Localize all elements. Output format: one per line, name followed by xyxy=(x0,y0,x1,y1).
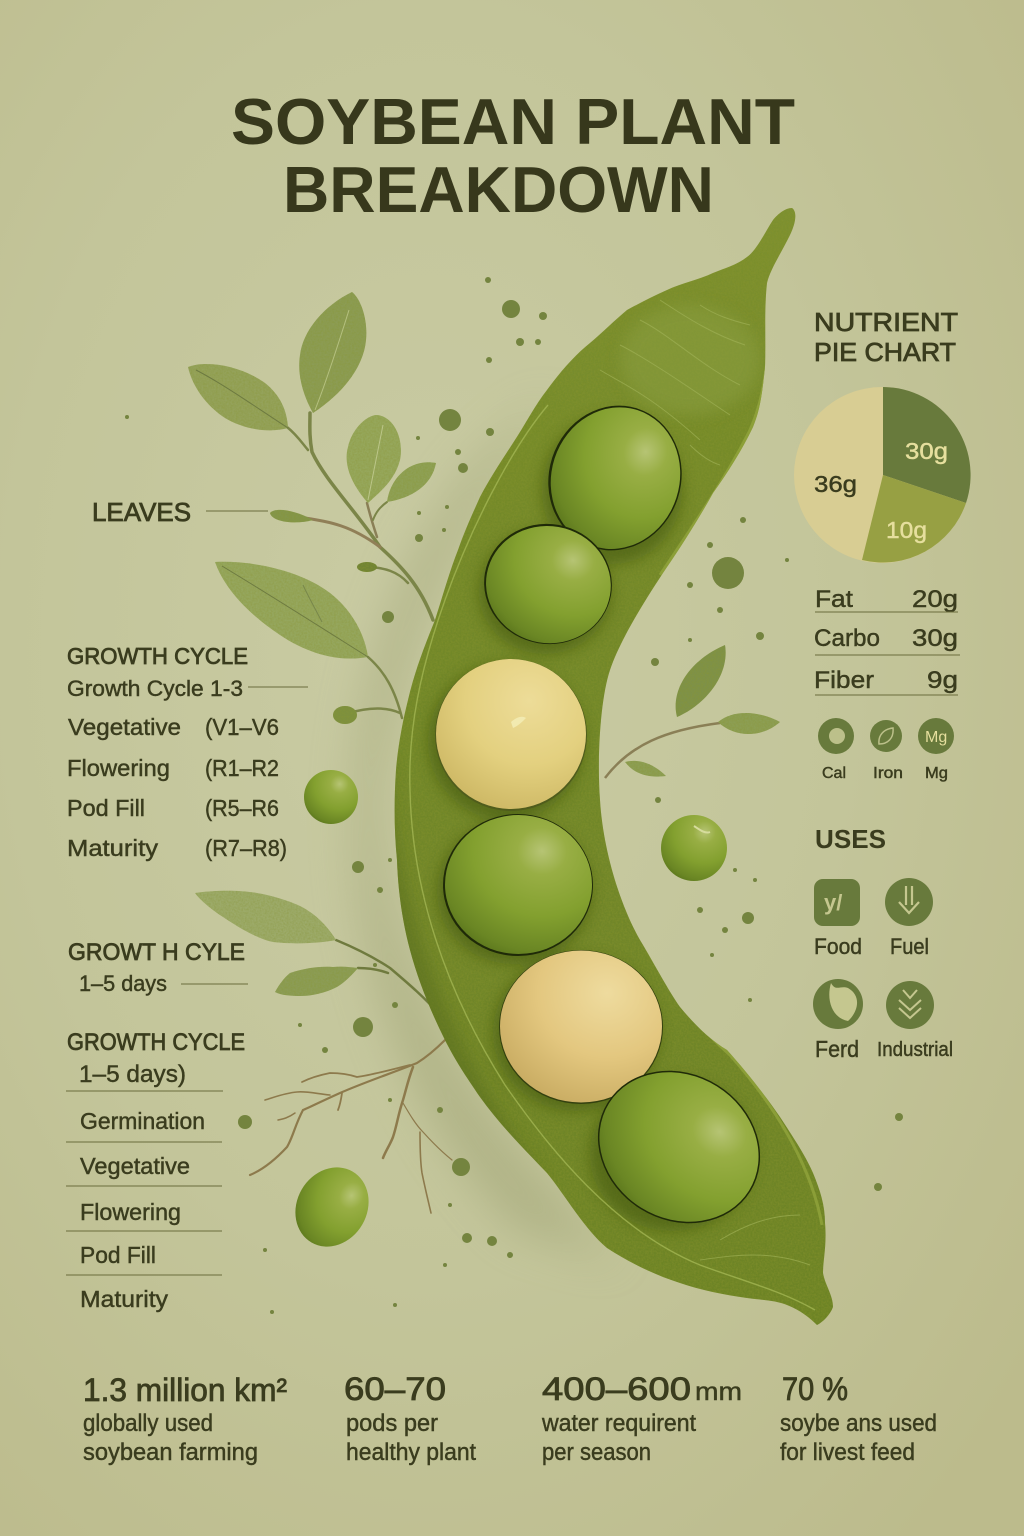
icon: food xyxy=(814,879,860,926)
nutrient pie chart heading: PIE CHART xyxy=(814,337,956,367)
nutrient pie chart heading: NUTRIENT xyxy=(814,307,958,337)
uses icons: Food xyxy=(814,934,862,959)
pod shading and veins xyxy=(379,285,822,1310)
bean 3 xyxy=(435,659,587,811)
stat: water: water requirent xyxy=(541,1410,696,1437)
nutrient table xyxy=(814,586,960,695)
growth cycle stages list: (V1–V6 xyxy=(205,714,279,740)
growth cycle days xyxy=(68,939,248,996)
growth cycle stages list: Pod Fill xyxy=(67,795,145,821)
pod body xyxy=(395,208,833,1325)
loose bean: right xyxy=(661,815,727,881)
growth cycle table: Vegetative xyxy=(80,1153,190,1179)
growth cycle stages list: Flowering xyxy=(67,755,170,781)
growth cycle stages list: Vegetative xyxy=(68,714,181,740)
nutrient table: 30g xyxy=(912,625,958,652)
mineral icons xyxy=(818,718,954,782)
buds xyxy=(270,510,313,522)
icon: Iron xyxy=(870,720,902,752)
stat: farmland: soybean farming xyxy=(83,1439,258,1466)
stat: farmland xyxy=(83,1372,287,1466)
growth cycle table: Pod Fill xyxy=(80,1242,156,1268)
pod shadow xyxy=(355,400,620,1260)
leaf 3 xyxy=(347,415,401,503)
bean 4 xyxy=(443,814,593,956)
bean 5 xyxy=(499,950,663,1104)
nutrient table: 9g xyxy=(927,667,958,694)
growth cycle table: 1–5 days) xyxy=(79,1061,186,1088)
leaf 4 xyxy=(387,462,436,502)
stat: pods: 60–70 xyxy=(344,1371,446,1407)
stems xyxy=(287,413,433,718)
growth cycle stages list: (R5–R6 xyxy=(205,795,279,821)
leaves label: LEAVES xyxy=(92,497,191,527)
growth cycle days: 1–5 days xyxy=(79,971,167,996)
mineral icons: Cal xyxy=(822,765,846,782)
uses icons: Fuel xyxy=(890,934,929,959)
stat: pods: healthy plant xyxy=(346,1439,476,1466)
roots xyxy=(250,1040,452,1213)
pie chart: 10g xyxy=(886,517,927,543)
bean 2 xyxy=(475,514,621,654)
growth cycle stages list: (R1–R2 xyxy=(205,755,279,781)
stat: water: mm xyxy=(695,1378,742,1406)
nutrient table: 20g xyxy=(912,586,958,613)
stat: water xyxy=(541,1371,742,1466)
stat: farmland: 1.3 million km² xyxy=(83,1372,287,1408)
upper leaf branch xyxy=(188,292,436,724)
growth cycle table: GROWTH CYCLE xyxy=(67,1029,245,1056)
growth cycle stages list xyxy=(67,643,308,861)
uses icons xyxy=(813,878,953,1062)
leaf 1 xyxy=(188,364,288,430)
stat: feed: for livest feed xyxy=(780,1439,915,1466)
uses icons: Ferd xyxy=(815,1036,859,1062)
title: BREAKDOWN xyxy=(283,153,714,226)
growth cycle table: Maturity xyxy=(80,1286,169,1312)
leaf 2 xyxy=(299,292,366,413)
icon: industrial xyxy=(886,981,934,1029)
stat: water: per season xyxy=(542,1439,651,1466)
nutrient table: Carbo xyxy=(814,625,880,652)
lower leaf branch xyxy=(195,891,438,1013)
bean 6 xyxy=(569,1041,789,1253)
leaf 5 xyxy=(215,562,368,659)
growth cycle stages list: GROWTH CYCLE xyxy=(67,643,248,669)
bean 1 xyxy=(530,388,700,568)
growth cycle stages list: Growth Cycle 1-3 xyxy=(67,676,243,701)
stat: water: 400–600 xyxy=(542,1371,691,1407)
growth cycle table xyxy=(66,1029,245,1312)
loose beans and specks xyxy=(125,277,903,1314)
mineral icons: Iron xyxy=(873,765,903,782)
icon: food: y/ xyxy=(824,890,842,915)
icon: ferd xyxy=(813,979,863,1029)
growth cycle stages list: Maturity xyxy=(67,835,159,861)
title xyxy=(231,85,795,226)
uses icons: Industrial xyxy=(877,1039,953,1061)
stat: pods: pods per xyxy=(346,1410,438,1437)
stat: farmland: globally used xyxy=(83,1410,213,1437)
growth cycle table: Germination xyxy=(80,1108,205,1134)
stat: feed: soybe ans used xyxy=(780,1410,937,1437)
stat: feed: 70 % xyxy=(782,1371,848,1407)
growth cycle days: GROWT H CYLE xyxy=(68,939,245,966)
stat: pods xyxy=(344,1371,476,1466)
loose bean: left xyxy=(304,770,358,824)
mineral icons: Mg xyxy=(925,765,948,782)
icon: Cal xyxy=(818,718,854,754)
loose bean: bottom xyxy=(281,1154,383,1260)
nutrient table: Fiber xyxy=(814,667,874,694)
uses heading: USES xyxy=(815,824,886,854)
specks xyxy=(125,277,903,1314)
growth cycle stages list: (R7–R8) xyxy=(205,835,287,861)
soybean pod xyxy=(379,208,833,1325)
pie chart: 30g xyxy=(905,438,948,464)
title: SOYBEAN PLANT xyxy=(231,85,795,158)
nutrient pie chart heading xyxy=(814,307,958,367)
pie chart xyxy=(794,387,971,563)
right leaf branch xyxy=(605,645,780,778)
pie chart: 36g xyxy=(814,471,857,497)
stat: feed xyxy=(780,1371,937,1466)
icon: Mg: Mg xyxy=(925,729,947,746)
growth cycle table: Flowering xyxy=(80,1199,181,1225)
nutrient table: Fat xyxy=(815,586,853,613)
icon: fuel xyxy=(885,878,933,926)
